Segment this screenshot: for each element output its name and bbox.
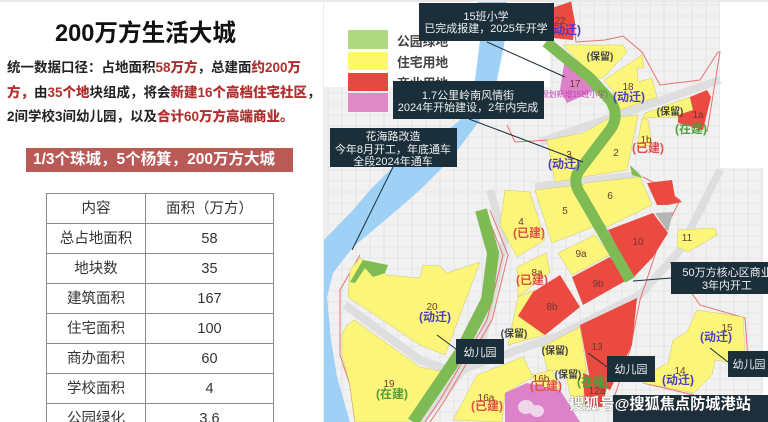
parcel numbers: 6	[607, 191, 613, 202]
callout: kindergarten 3: 幼儿园	[732, 358, 766, 371]
icon: wechat bubbles	[518, 400, 544, 417]
callout: huahai road	[330, 128, 457, 168]
parcel numbers: 15	[721, 323, 733, 334]
banner: 1/3个珠城，5个杨箕，200万方大城	[33, 151, 275, 168]
planning boundary outlines	[340, 2, 748, 422]
parcel status labels: (动迁)	[548, 156, 580, 171]
parcel numbers: 9b	[592, 279, 604, 290]
parcel status labels: (动迁)	[613, 89, 645, 104]
parcel status labels: (已建)	[471, 398, 503, 413]
callout: school: 15班小学	[463, 9, 509, 23]
top gray strip	[0, 0, 768, 2]
banner	[26, 148, 293, 172]
parcel status labels: (动迁)	[662, 372, 694, 387]
parcel numbers: 14	[674, 366, 686, 377]
intro text block	[7, 60, 321, 124]
parcel status labels: (保留)	[657, 105, 683, 118]
parcel status labels: (规划新增15班小学)	[538, 89, 608, 99]
parcel numbers: 18	[622, 82, 634, 93]
parcel numbers: 1b	[640, 135, 652, 146]
parcel numbers: 3	[566, 150, 572, 161]
data table: 地块数	[74, 261, 118, 277]
callout: kindergarten 2: 幼儿园	[614, 363, 648, 376]
parcel status labels: (已建)	[530, 378, 562, 393]
data table: 面积（万方）	[166, 201, 253, 217]
callout: lingnan street: 1.7公里岭南风情街	[422, 88, 514, 102]
data table: 住宅面积	[67, 321, 125, 337]
legend: 商业用地	[397, 76, 448, 91]
parcel status labels: (保留)	[587, 50, 613, 63]
parcel status labels: (在建)	[376, 386, 408, 401]
callout: lingnan street: 2024年开始建设，2年内完成	[398, 100, 538, 114]
parcel numbers: 1a	[692, 110, 704, 121]
callout: huahai road: 花海路改造	[366, 129, 420, 143]
parcel status labels: (保留)	[501, 327, 527, 340]
parcel numbers: 8b	[546, 302, 558, 313]
data table: 4	[205, 381, 214, 397]
callout: huahai road: 全段2024年通车	[353, 154, 433, 168]
parcel status labels: (已建)	[513, 225, 545, 240]
parcel status labels: (动迁)	[549, 22, 581, 37]
callout: core commercial	[671, 262, 768, 294]
data table: 建筑面积	[67, 291, 125, 307]
data table: 167	[197, 291, 222, 307]
parcel status labels	[376, 22, 732, 413]
parcel status labels: (动迁)	[419, 309, 451, 324]
parcel numbers: 11	[682, 233, 693, 244]
plaza	[655, 212, 673, 232]
callout: core commercial: 3年内开工	[702, 278, 752, 292]
land parcels: residential	[342, 45, 745, 422]
parcel numbers: 5	[562, 206, 568, 217]
legend	[348, 30, 448, 112]
parcel numbers: 2	[613, 148, 619, 159]
land parcels: school and education	[505, 58, 600, 422]
parcel numbers: 20	[426, 302, 438, 313]
callout: kindergarten 1: 幼儿园	[464, 346, 496, 359]
parcel numbers: 8a	[531, 268, 543, 279]
parcel numbers: 22	[554, 16, 566, 27]
callout: lingnan street	[393, 81, 544, 119]
parcel numbers	[383, 16, 733, 404]
callout: kindergarten 3	[728, 351, 768, 377]
data table: 内容	[82, 201, 110, 217]
parcel status labels: (在建)	[675, 121, 707, 136]
data table: 60	[201, 351, 218, 367]
land parcels: commercial	[518, 2, 711, 407]
intro text block: 2间学校3间幼儿园，以及合计60万方高端商业。	[7, 109, 294, 124]
data table: 35	[201, 261, 218, 277]
parcel numbers: 16b	[533, 374, 550, 385]
callout: kindergarten 2	[607, 356, 655, 382]
data table: 58	[201, 231, 218, 247]
legend: 公园绿地	[397, 34, 448, 49]
park greenway	[413, 42, 630, 422]
watermark: 搜狐号@搜狐焦点防城港站	[569, 395, 751, 413]
data table: 学校面积	[67, 381, 125, 397]
parcel status labels: (已建)	[516, 272, 548, 287]
parcel status labels: (动迁)	[700, 329, 732, 344]
park patches	[350, 165, 643, 283]
data table: 100	[197, 321, 222, 337]
parcel numbers: 9a	[575, 249, 587, 260]
roads	[345, 80, 720, 422]
parcel numbers: 13	[591, 342, 603, 353]
legend: 住宅用地	[397, 55, 448, 70]
intro text block: 统一数据口径：占地面积58万方，总建面约200万	[7, 60, 301, 75]
callout: school: 已完成报建，2025年开学	[424, 21, 548, 35]
callout: school	[419, 3, 554, 41]
data table: 商办面积	[67, 351, 125, 367]
parcel status labels: (保留)	[555, 368, 581, 381]
title: 200万方生活大城	[55, 21, 236, 47]
parcel numbers: 16a	[478, 393, 495, 404]
parcel numbers: 17	[569, 79, 581, 90]
parcel status labels: (保留)	[542, 344, 568, 357]
parcel status labels: (在建)	[577, 374, 609, 389]
parcel numbers: 19	[383, 379, 395, 390]
intro text block: 方，由35个地块组成，将会新建16个高档住宅社区，	[7, 85, 321, 100]
callout: huahai road: 今年8月开工，年底通车	[335, 142, 451, 156]
parcel numbers: 12a	[589, 386, 606, 397]
bottom dark strip	[613, 395, 768, 422]
parcel numbers: 10	[632, 237, 644, 248]
leader lines	[352, 42, 728, 367]
river	[324, 2, 507, 422]
parcel numbers: 4	[518, 217, 524, 228]
data table: 总占地面积	[60, 231, 132, 247]
callout: kindergarten 1	[456, 339, 504, 364]
data table	[46, 193, 274, 422]
parcel status labels: (已建)	[632, 140, 664, 155]
